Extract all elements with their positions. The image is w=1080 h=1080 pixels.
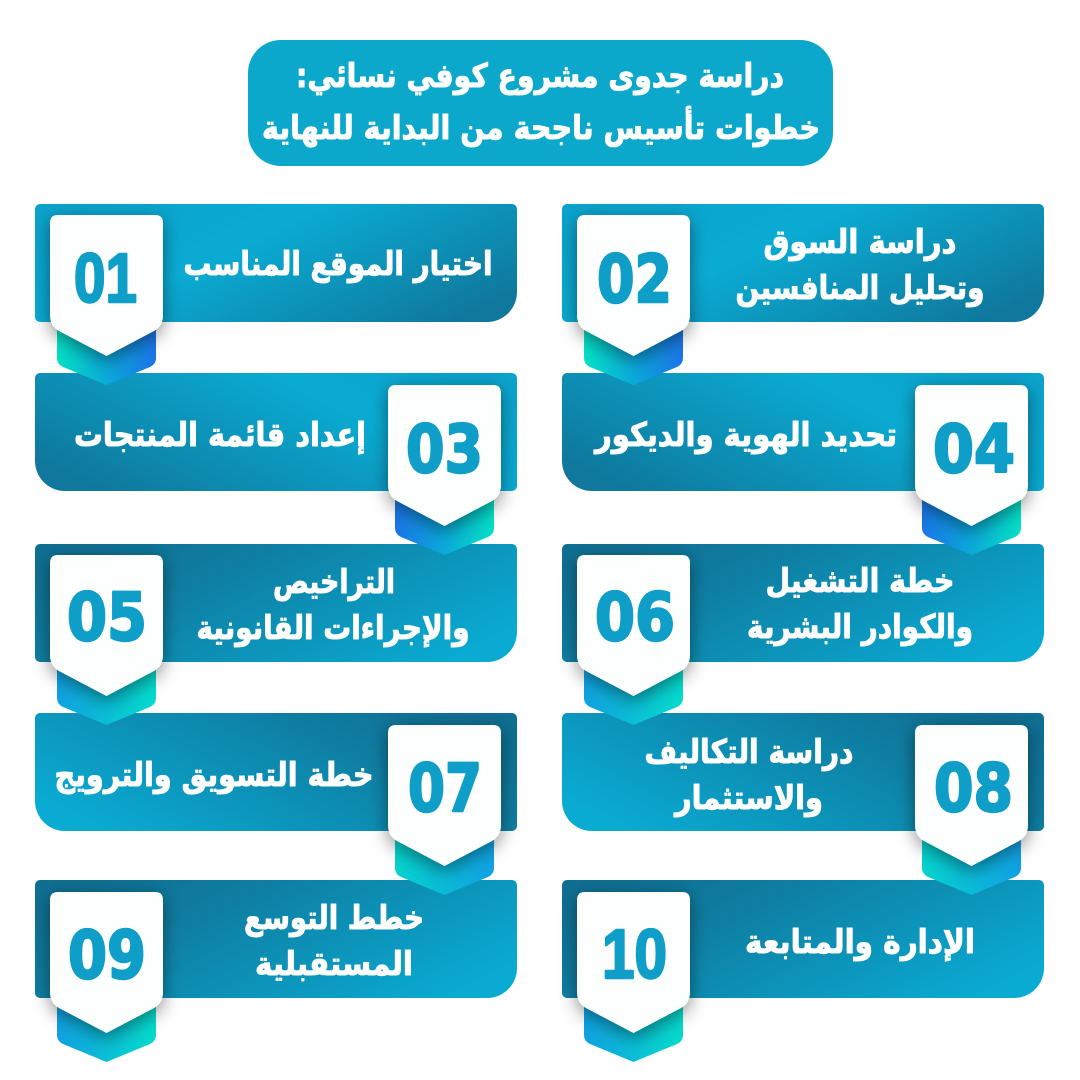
number 01: 01 [74, 239, 137, 317]
step 09: خطط التوسع [244, 898, 424, 938]
step 07 [35, 713, 517, 895]
title [248, 40, 833, 166]
number 05: 05 [67, 579, 147, 656]
step 03 [35, 373, 517, 555]
step 08: والاستثمار [673, 778, 823, 818]
number 04: 04 [933, 411, 1015, 488]
step 04 [562, 373, 1044, 555]
number 06: 06 [595, 579, 675, 656]
step 04: تحديد الهوية والديكور [593, 415, 897, 455]
number 08: 08 [934, 750, 1013, 827]
title: خطوات تأسيس ناجحة من البداية للنهاية [262, 106, 820, 148]
step 07: خطة التسويق والترويج [54, 755, 374, 795]
step 10: الإدارة والمتابعة [745, 922, 975, 962]
step 05: التراخيص [273, 562, 395, 602]
step 01 [35, 204, 517, 385]
step 06 [562, 544, 1044, 725]
step 06: خطة التشغيل [766, 561, 954, 600]
step 05 [35, 544, 517, 725]
number 09: 09 [68, 917, 146, 994]
number 07: 07 [408, 750, 482, 827]
step 02 [562, 204, 1044, 385]
number 02: 02 [597, 241, 672, 318]
step 02: وتحليل المنافسين [736, 268, 984, 308]
step 05: والإجراءات القانونية [196, 608, 470, 648]
step 02: دراسة السوق [764, 222, 956, 262]
title: دراسة جدوى مشروع كوفي نسائي: [296, 56, 784, 96]
step 09: المستقبلية [255, 944, 413, 983]
step 06: والكوادر البشرية [747, 607, 973, 647]
step 09 [35, 880, 517, 1062]
number 03: 03 [406, 411, 483, 488]
step 01: اختيار الموقع المناسب [184, 244, 492, 284]
step 08: دراسة التكاليف [644, 732, 854, 771]
step 03: إعداد قائمة المنتجات [74, 415, 366, 455]
step 10 [562, 880, 1044, 1062]
step 08 [562, 713, 1044, 895]
number 10: 10 [602, 915, 667, 993]
